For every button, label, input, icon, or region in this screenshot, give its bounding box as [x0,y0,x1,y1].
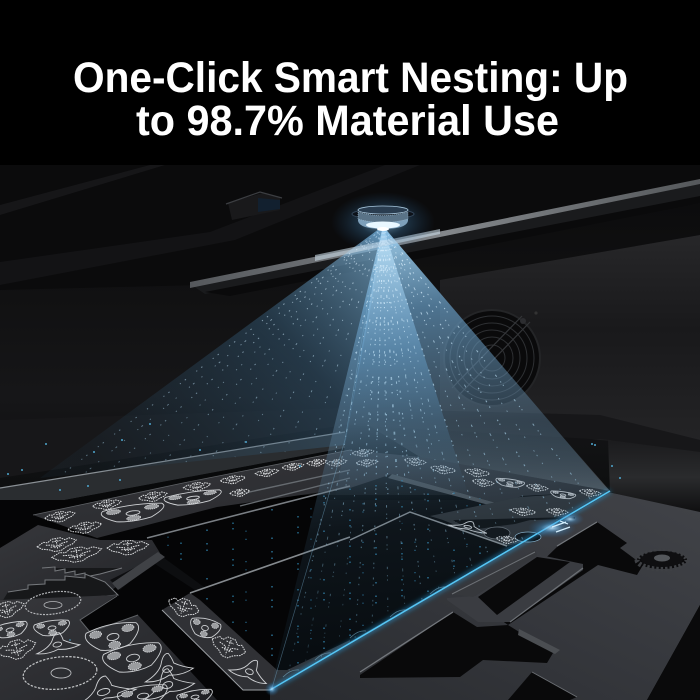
scanning data rays [60,228,591,680]
rear strip of the sheet [33,450,610,538]
ventilation fan grille [444,310,540,406]
scanner lens [331,192,435,252]
beam-lit wall behind the right of the fan [360,420,610,491]
light beam: left fan [40,226,383,478]
top housing box [226,192,282,220]
L-shaped strip with parts [162,537,350,690]
overhead rail [190,179,700,296]
data points falling inside cut-outs [167,480,481,664]
upper right plate with parts [350,491,612,546]
floor cut-outs with raised strips [360,522,643,700]
nested parts, dashed outlines [0,449,601,700]
rear left guide rails [0,432,700,522]
title: to 98.7% Material Use [136,97,559,145]
title: One-Click Smart Nesting: Up [73,54,628,102]
left plate with serrated parts [0,525,204,605]
rail highlight where beam crosses [315,229,440,261]
lower left plate [0,595,217,700]
beam edge highlight [272,285,371,688]
light beam: bright core [335,226,470,500]
blue laser edge [265,491,610,696]
gear part on floor [637,551,687,569]
machine interior background [0,165,700,495]
scattered data specks [7,423,621,641]
cutting bed: metal sheet base [0,492,700,700]
light beam: central wedge [270,226,608,690]
title [73,54,628,145]
